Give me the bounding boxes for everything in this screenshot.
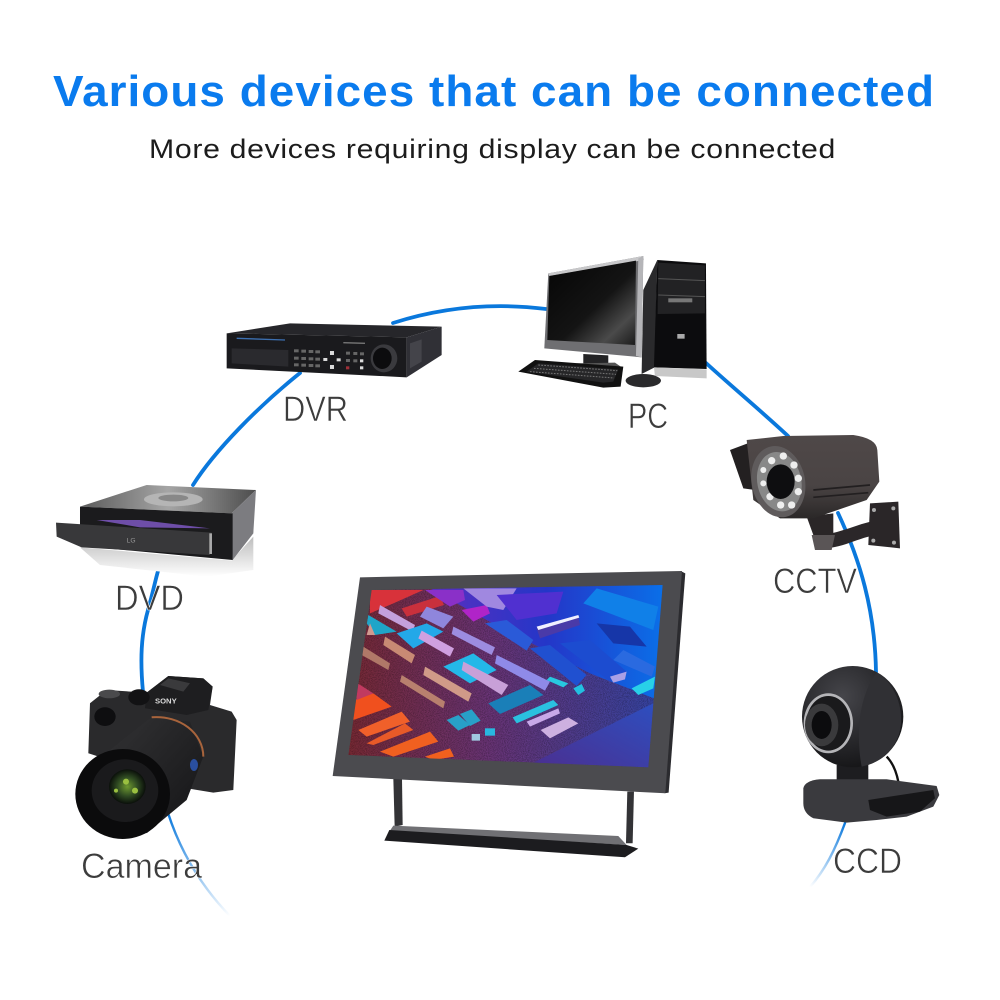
infrared lens ring [745, 441, 812, 522]
connecting blue cables [141, 306, 876, 916]
mouse [626, 374, 661, 387]
monitor bezel [665, 571, 685, 793]
label: DVD: DVD [115, 579, 184, 618]
label: DVR: DVR [283, 390, 348, 429]
wall bracket [807, 502, 900, 550]
label: CCTV: CCTV [773, 562, 858, 601]
icon: security CCTV camera [730, 435, 900, 550]
label: Camera: Camera [81, 847, 203, 886]
icon: portable monitor on stand [333, 571, 685, 857]
icon: DVD drive [56, 485, 256, 577]
webcam stand [803, 765, 939, 823]
stand [384, 778, 638, 857]
icon: webcam [802, 666, 939, 823]
label: CCD: CCD [833, 842, 902, 881]
housing [730, 440, 757, 490]
icon: mirrorless camera [75, 676, 237, 839]
keyboard [518, 360, 623, 388]
label: PC: PC [628, 397, 668, 436]
icon: DVD drive: LG [127, 538, 136, 545]
title: Various devices that can be connected [53, 67, 935, 116]
screen image [348, 583, 663, 768]
brand and model marks: SONY [155, 696, 177, 705]
icon: desktop PC [518, 256, 707, 388]
tower [642, 260, 707, 378]
camera body [88, 676, 237, 793]
monitor [544, 256, 644, 369]
webcam sphere [802, 666, 903, 767]
subtitle: More devices requiring display can be connected [149, 134, 836, 164]
icon: DVR recorder [227, 323, 442, 377]
lens barrel [75, 717, 203, 839]
